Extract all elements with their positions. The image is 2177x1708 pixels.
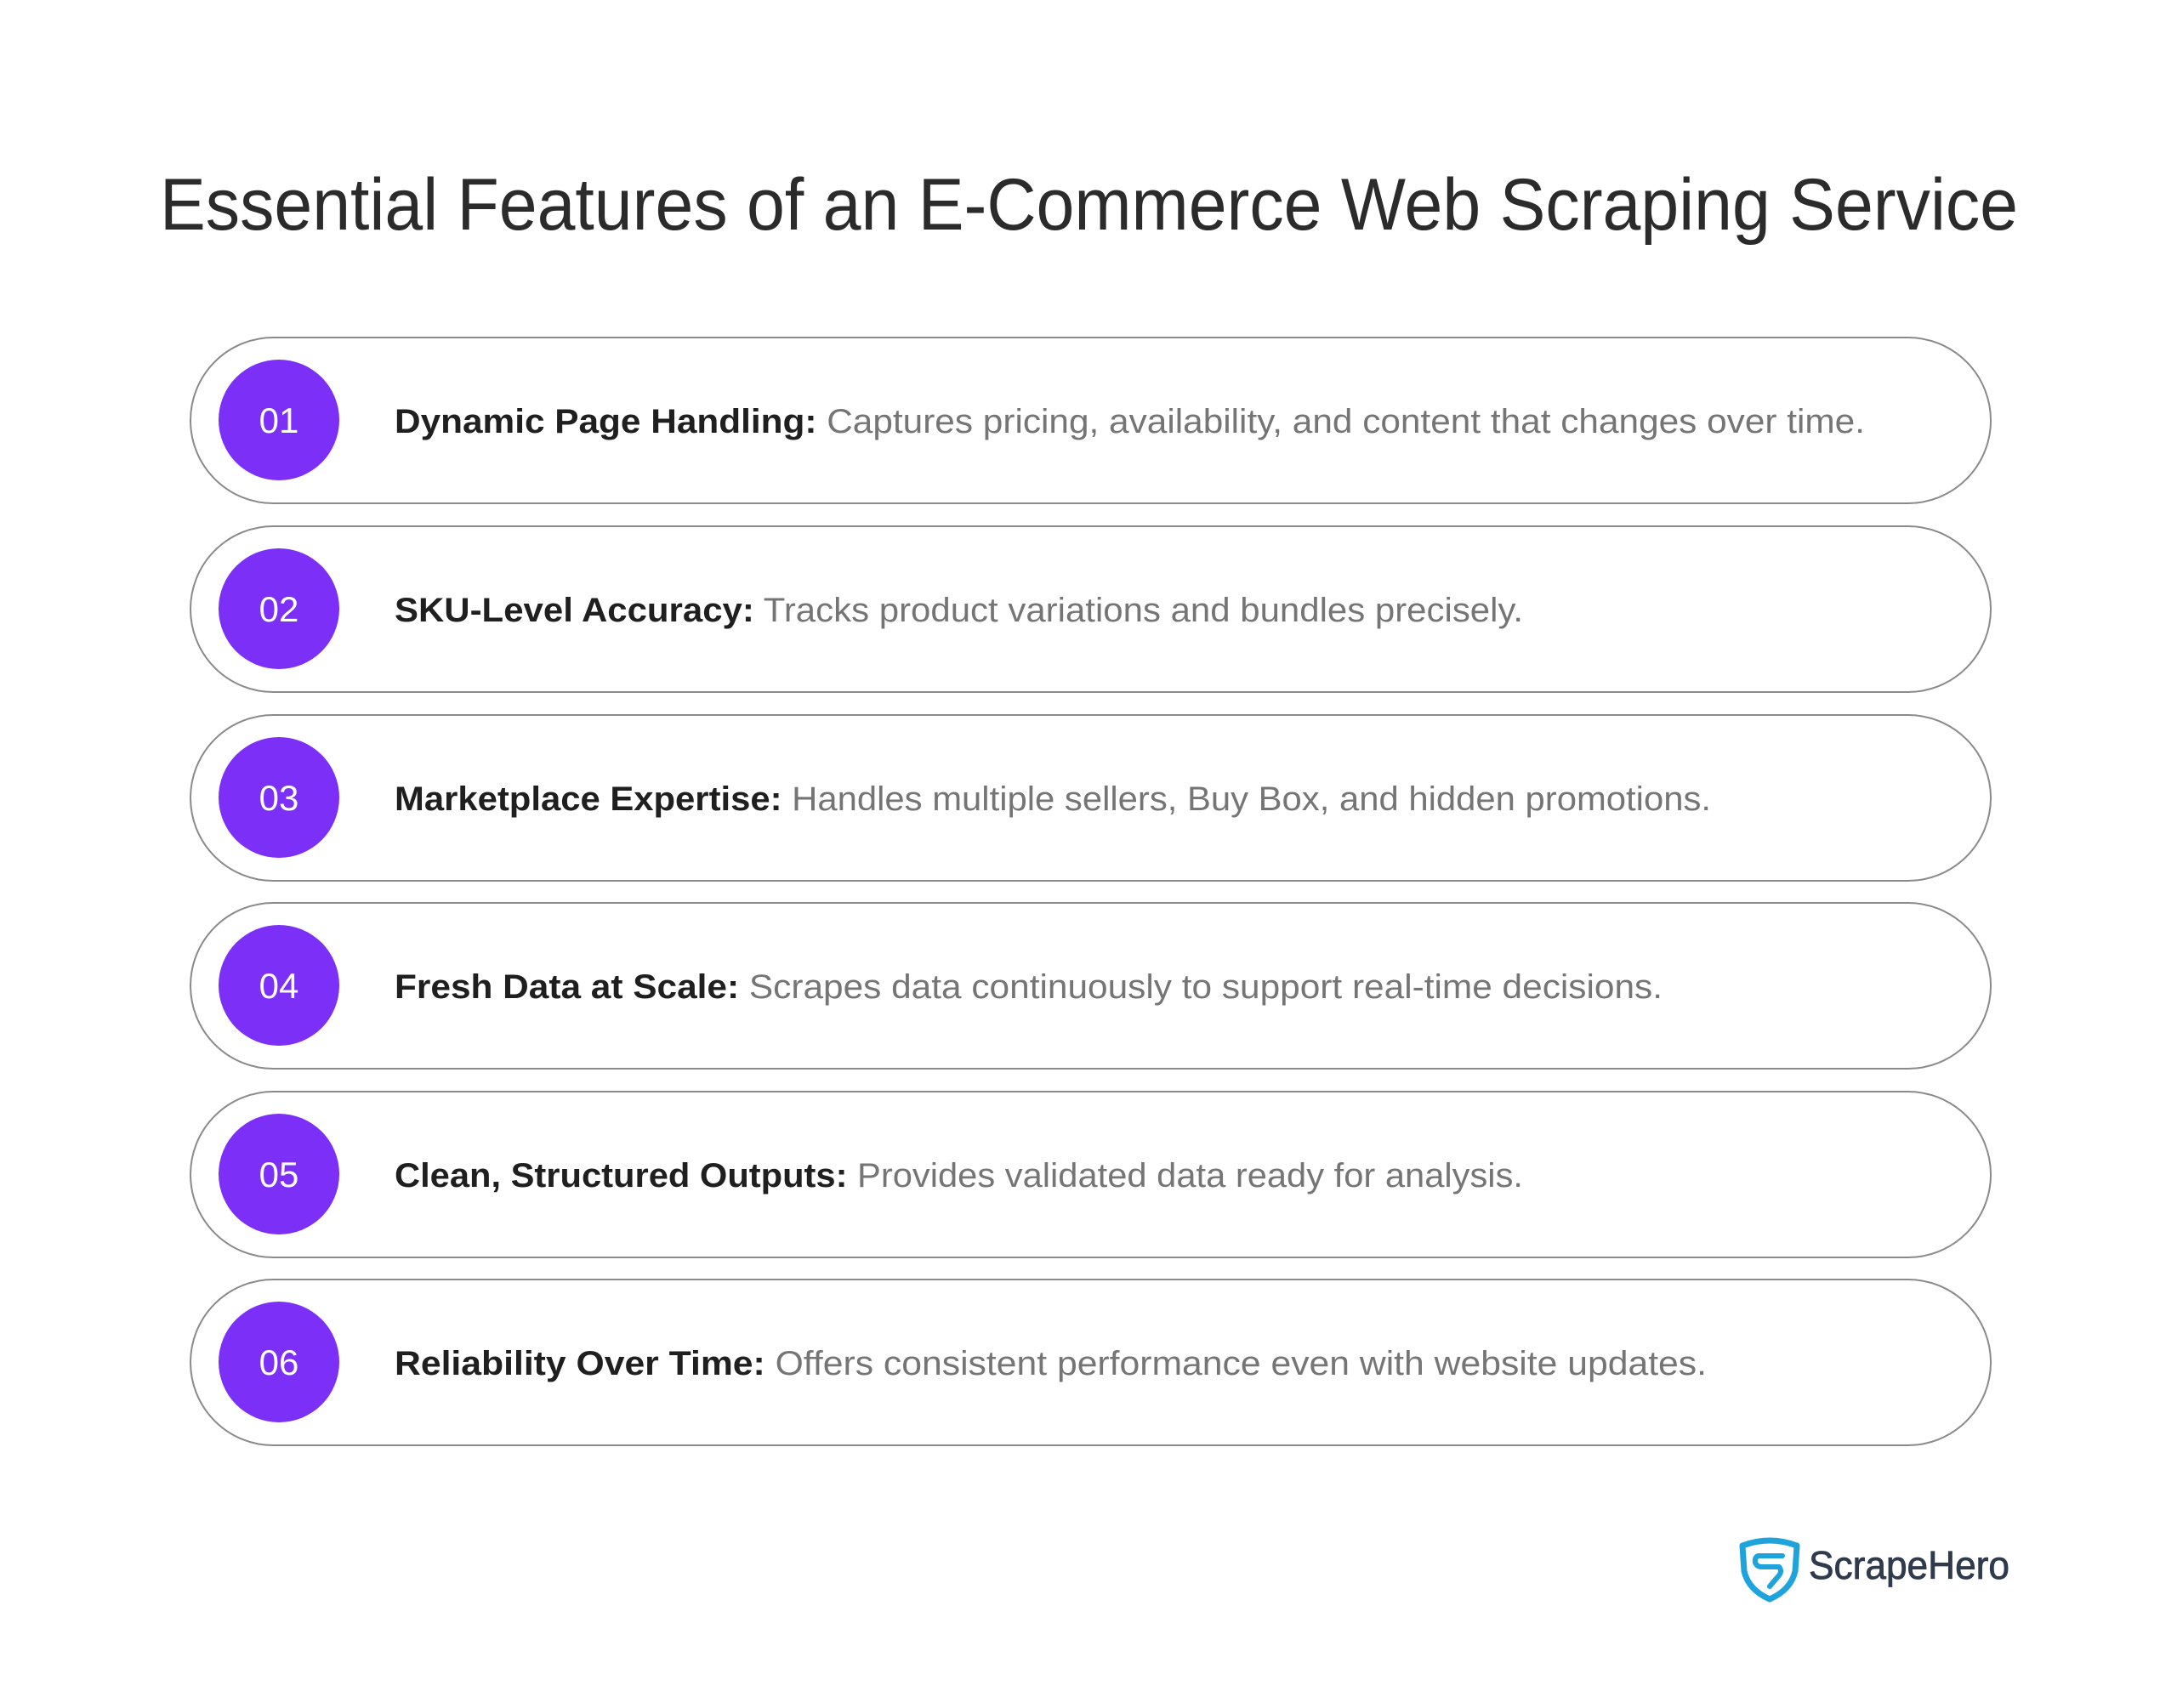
panel: row 03 — [190, 715, 1991, 881]
icon: number badge 02 — [219, 548, 339, 669]
text: clean structured outputs: Clean, Structured Outputs: Provides validated data ready for analysis. — [395, 1157, 1523, 1194]
icon: number badge 05: 05 — [259, 1155, 298, 1194]
icon: number badge 01: 01 — [259, 400, 298, 440]
icon: number badge 03: 03 — [259, 778, 298, 818]
icon: number badge 06: 06 — [259, 1342, 298, 1382]
icon: number badge 05 — [219, 1114, 339, 1234]
panel: row 06 — [190, 1280, 1991, 1445]
panel: row 05 — [190, 1092, 1991, 1257]
icon: number badge 04: 04 — [259, 966, 298, 1006]
icon: number badge 02: 02 — [259, 589, 298, 629]
text: marketplace expertise: Marketplace Expertise: Handles multiple sellers, Buy Box, and hidden promotions. — [395, 780, 1711, 818]
icon: number badge 03 — [219, 737, 339, 858]
text: dynamic page handling: Dynamic Page Handling: Captures pricing, availability, and content that changes over time. — [395, 403, 1865, 440]
panel: row 02 — [190, 526, 1991, 692]
logo: ScrapeHero — [1742, 1541, 2009, 1599]
text: SKU-level accuracy: SKU-Level Accuracy: Tracks product variations and bundles precisely. — [395, 592, 1523, 629]
icon: number badge 06 — [219, 1302, 339, 1422]
icon: number badge 01 — [219, 360, 339, 480]
panel: row 04 — [190, 903, 1991, 1069]
title: Essential Features of an E-Commerce Web Scraping Service — [160, 164, 2018, 246]
panel: row 01 — [190, 338, 1991, 503]
logo text: ScrapeHero — [1809, 1543, 2009, 1587]
icon: number badge 04 — [219, 925, 339, 1046]
icon: shield — [1742, 1541, 1797, 1599]
text: fresh data at scale: Fresh Data at Scale: Scrapes data continuously to support real-time decisions. — [395, 968, 1663, 1006]
text: reliability over time: Reliability Over Time: Offers consistent performance even with website updates. — [395, 1345, 1707, 1382]
